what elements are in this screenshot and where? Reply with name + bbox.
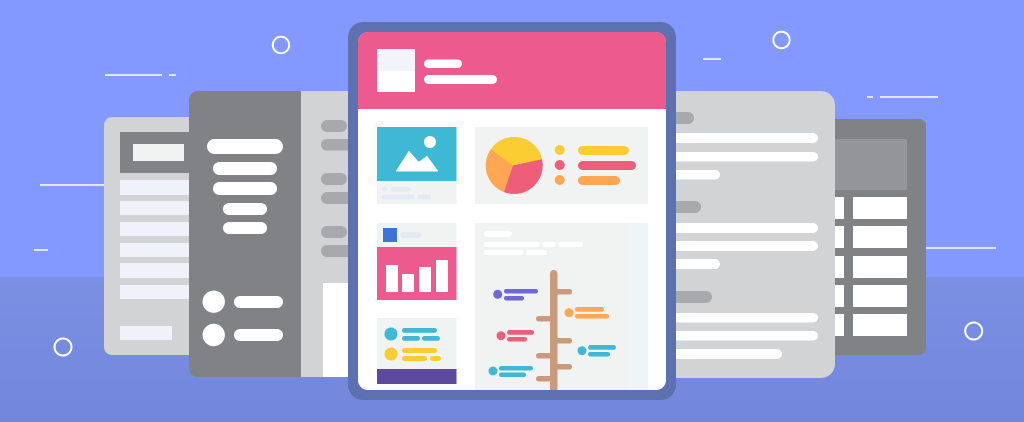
bar chart card (377, 223, 456, 300)
timeline node purple (493, 289, 538, 300)
timeline card (475, 223, 648, 400)
pie legend (555, 145, 636, 185)
list card (377, 318, 456, 384)
panel: back right table card (810, 119, 926, 355)
panel: right text card (640, 91, 835, 378)
panel: left sidebar card (189, 91, 371, 377)
tablet screen (358, 32, 666, 400)
pie chart (486, 137, 543, 194)
decorative lines and circles (34, 32, 996, 356)
timeline node teal (578, 345, 616, 356)
background ground band (0, 277, 1024, 422)
timeline node blue (488, 366, 533, 377)
timeline trunk (536, 270, 572, 400)
pie chart card (475, 127, 648, 204)
header band (358, 32, 666, 109)
panel: back left form card (104, 117, 214, 355)
tablet frame (348, 22, 676, 400)
background sky (0, 0, 1024, 278)
timeline node red (496, 330, 534, 342)
panel: front tablet (348, 22, 676, 400)
timeline node orange (564, 307, 609, 318)
image placeholder card (377, 127, 456, 204)
